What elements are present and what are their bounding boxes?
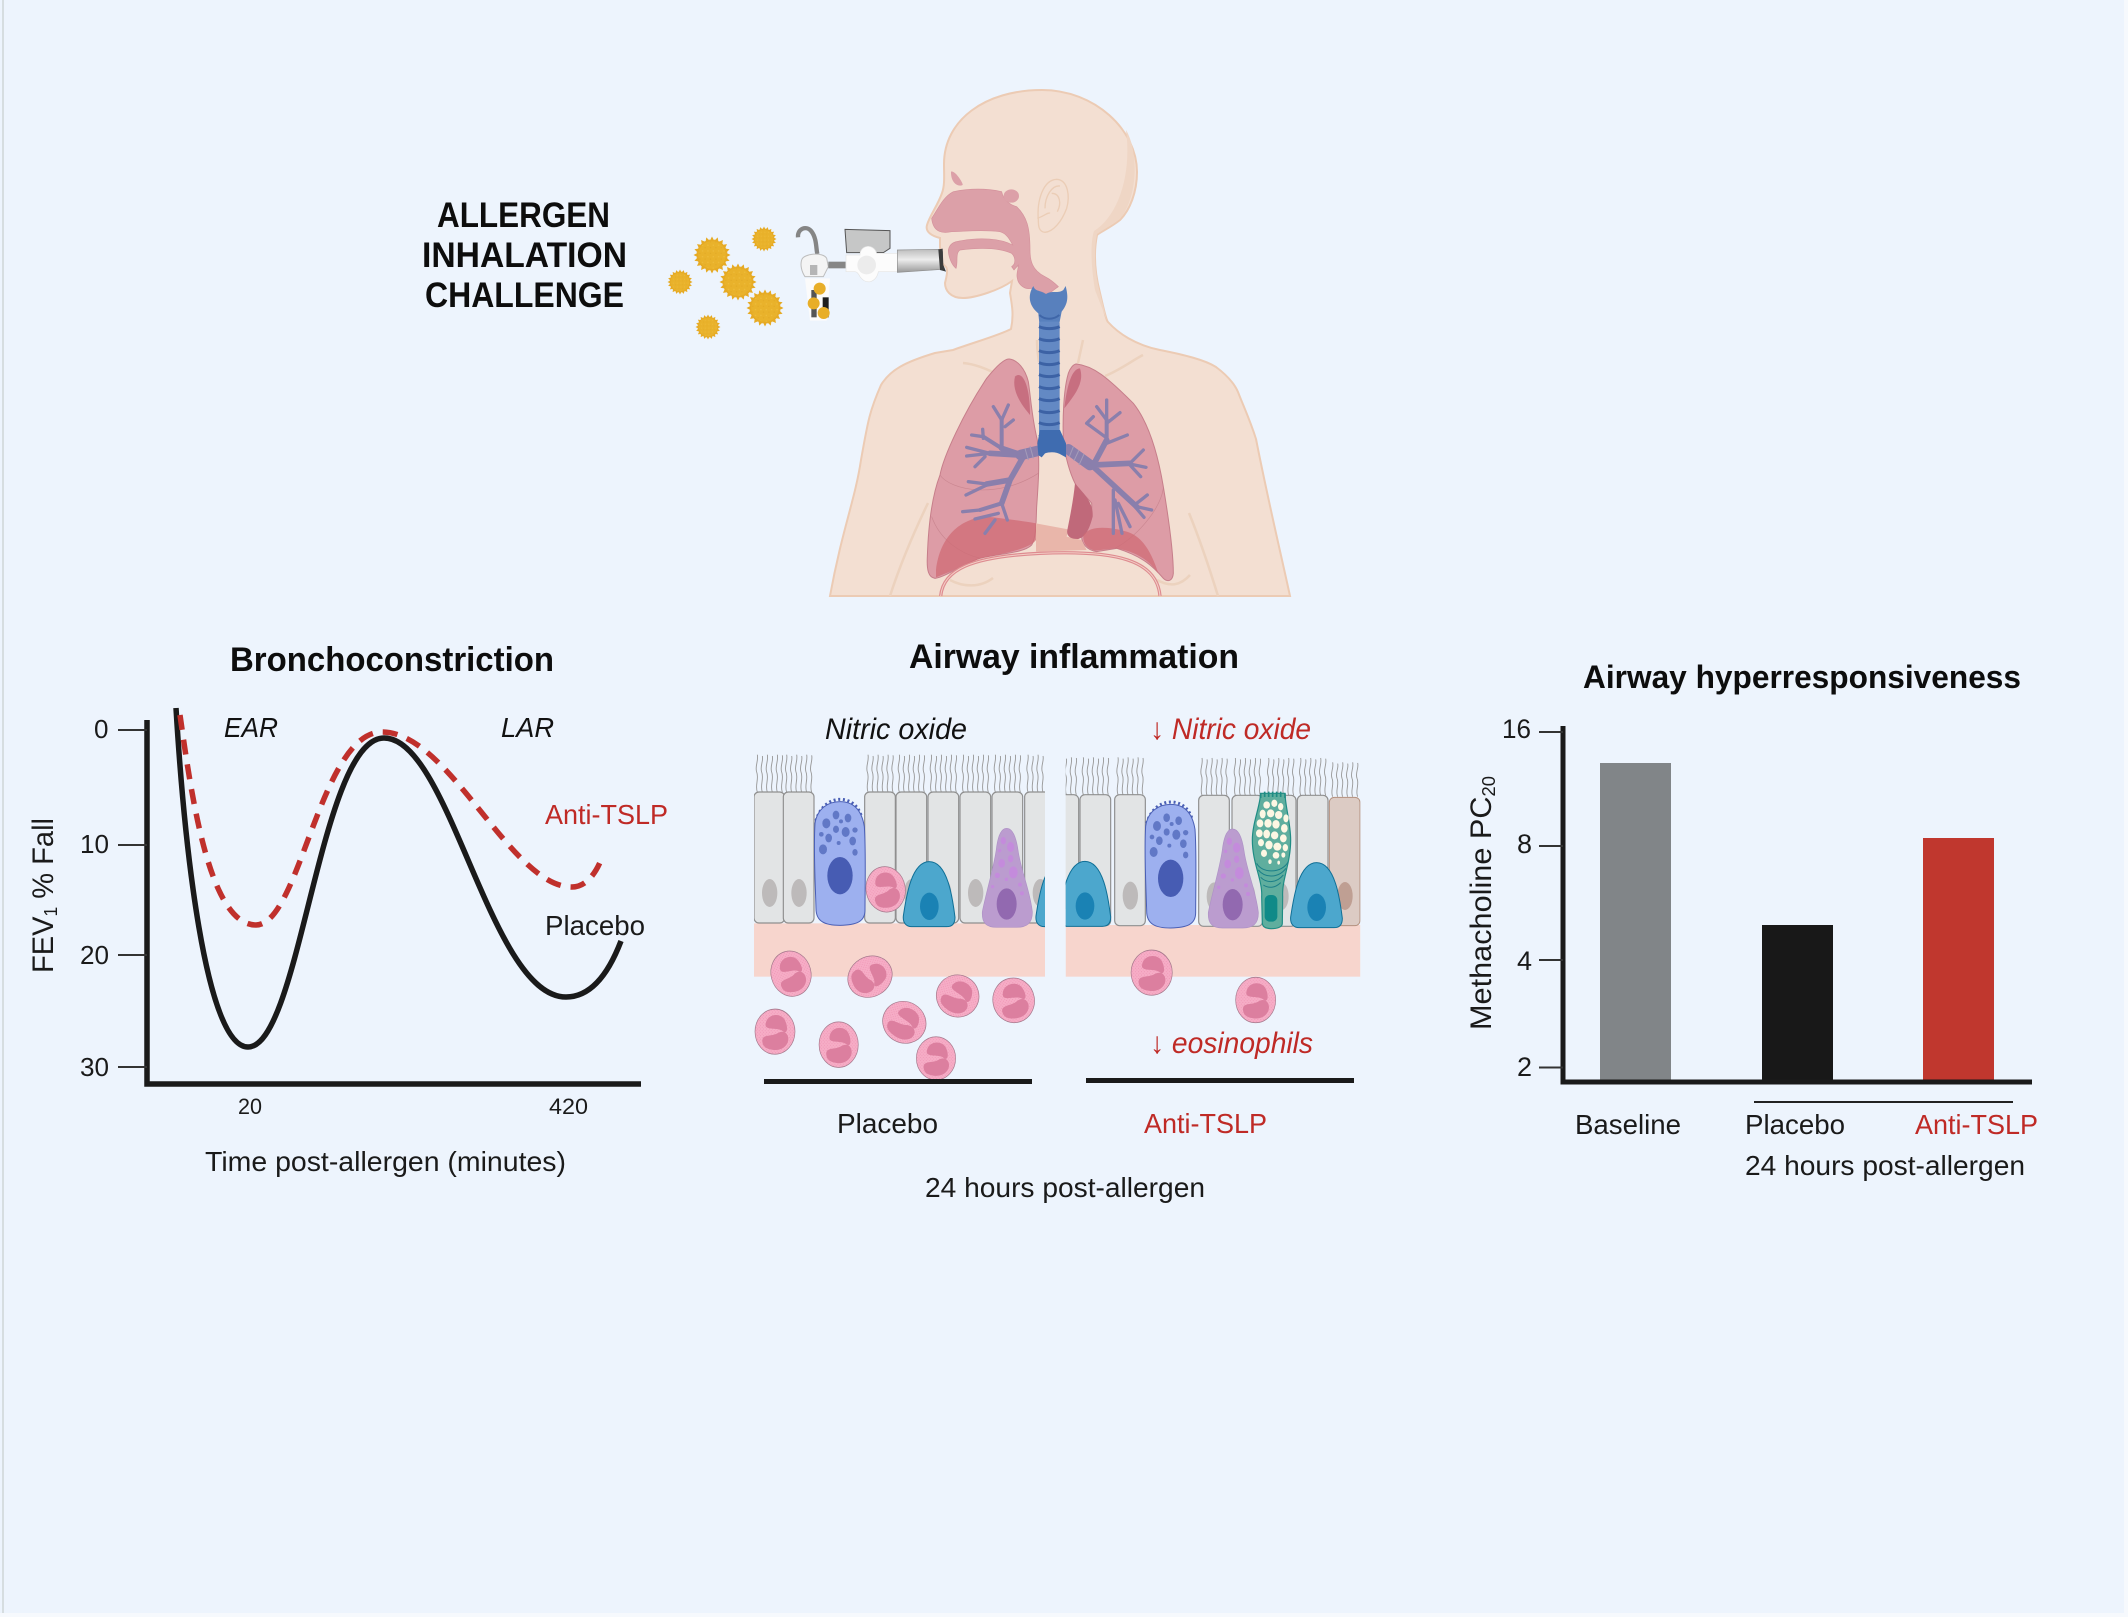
y axis ticks labels: 0 xyxy=(94,714,108,744)
anti-TSLP dashed curve xyxy=(180,715,601,925)
x axis tick labels: 20 xyxy=(238,1094,262,1119)
line chart: FEV1 fall over time: 420 xyxy=(549,1094,588,1119)
sphenoid sinus xyxy=(1004,189,1019,203)
valve box xyxy=(845,229,890,253)
line chart: FEV1 fall over time xyxy=(27,708,668,1177)
title: allergen inhalation challenge: CHALLENGE xyxy=(425,276,624,315)
anti-TSLP bar xyxy=(1923,838,1994,1081)
left lung xyxy=(927,359,1039,578)
y axis ticks labels: 30 xyxy=(80,1052,109,1082)
nasal cavity and pharynx xyxy=(932,189,1058,294)
brown ciliated cell xyxy=(1329,762,1360,926)
title: allergen inhalation challenge: ALLERGEN xyxy=(437,196,610,235)
mouthpiece cylinder xyxy=(897,249,943,272)
illustration: human torso with airways and lungs xyxy=(830,90,1290,596)
anti-TSLP baseline xyxy=(1086,1078,1354,1083)
anti-TSLP label: Anti-TSLP xyxy=(1144,1108,1267,1139)
panel: airway inflammation xyxy=(754,638,1360,1203)
icon: pollen allergen particles xyxy=(668,226,784,340)
y axis title: % Fall xyxy=(27,818,60,907)
title: allergen inhalation challenge xyxy=(422,196,627,315)
panel: bronchoconstriction xyxy=(27,641,668,1177)
y axis tick labels xyxy=(1502,714,1532,1082)
y axis ticks labels: 20 xyxy=(80,940,109,970)
right bronchial tree xyxy=(1068,400,1152,533)
axes xyxy=(1563,726,2032,1082)
left bronchial tree xyxy=(963,405,1037,533)
head and neck shading xyxy=(1092,130,1135,321)
anti-TSLP label: Anti-TSLP xyxy=(1915,1109,2038,1140)
time caption: 24 hours post-allergen xyxy=(1745,1150,2025,1181)
y axis tick labels: 2 xyxy=(1517,1052,1532,1082)
post-allergen bracket line xyxy=(1754,1101,2013,1103)
diaphragm arc xyxy=(941,553,1160,596)
y axis title: FEV xyxy=(27,915,60,973)
eosinophils label: ↓ eosinophils xyxy=(1150,1027,1313,1060)
y axis tick labels: 8 xyxy=(1517,829,1532,859)
icon: nebulizer mouthpiece xyxy=(798,228,946,321)
y axis tick labels: 16 xyxy=(1502,714,1531,744)
chest detail xyxy=(927,359,1173,596)
lung fissures xyxy=(932,473,1163,558)
anti-TSLP nitric oxide label: ↓ Nitric oxide xyxy=(1150,713,1311,746)
y axis ticks labels: 10 xyxy=(80,829,109,859)
placebo epithelium illustration xyxy=(754,754,1045,1079)
line chart: FEV1 fall over time: Placebo xyxy=(545,910,645,941)
hook tube xyxy=(798,228,817,254)
baseline label: Baseline xyxy=(1575,1109,1681,1140)
title: allergen inhalation challenge: INHALATION xyxy=(422,236,627,275)
phase labels: EAR xyxy=(224,712,278,743)
right lung xyxy=(1063,364,1173,581)
placebo label: Placebo xyxy=(1745,1109,1845,1140)
heading: Airway hyperresponsiveness xyxy=(1583,659,2021,695)
panel: airway hyperresponsiveness xyxy=(1465,659,2038,1181)
body silhouette xyxy=(830,90,1290,596)
placebo baseline xyxy=(764,1079,1032,1084)
central band xyxy=(1036,523,1087,552)
y axis ticks labels xyxy=(80,714,109,1082)
page edge line xyxy=(2,0,4,1617)
y axis tick labels: 4 xyxy=(1517,946,1532,976)
carina xyxy=(1037,430,1066,457)
teal mucus cell xyxy=(1252,792,1291,929)
baseline bar xyxy=(1600,763,1671,1081)
face and airway detail xyxy=(932,172,1068,442)
line chart: FEV1 fall over time: LAR xyxy=(501,712,554,743)
bar chart: methacholine PC20 xyxy=(1465,714,2038,1181)
heart shadow xyxy=(1067,483,1093,539)
nebulizer cup with allergen xyxy=(805,278,830,321)
heading: Airway inflammation xyxy=(909,638,1239,676)
series labels: Anti-TSLP xyxy=(545,799,668,830)
time caption: 24 hours post-allergen xyxy=(925,1172,1205,1203)
heading: Bronchoconstriction xyxy=(230,641,554,679)
x axis title: Time post-allergen (minutes) xyxy=(205,1146,566,1177)
nebulizer chamber xyxy=(801,254,828,277)
diaphragm domes xyxy=(936,517,1036,577)
ear xyxy=(1037,179,1068,232)
upper lung shading xyxy=(1014,375,1030,415)
placebo nitric oxide label: Nitric oxide xyxy=(825,713,967,746)
frontal sinus xyxy=(951,172,963,186)
valve cross xyxy=(846,246,897,282)
axes xyxy=(147,720,641,1084)
placebo curve xyxy=(176,708,621,1047)
y axis title: 1 xyxy=(41,907,61,916)
y axis title: Methacholine PC xyxy=(1465,802,1498,1030)
y axis title: 20 xyxy=(1479,776,1499,796)
placebo bar xyxy=(1762,925,1833,1081)
larynx xyxy=(1030,286,1067,323)
body creases xyxy=(890,340,1218,596)
bronchus rings xyxy=(1025,446,1084,465)
trachea rings xyxy=(1039,322,1060,442)
anti-TSLP epithelium illustration xyxy=(1048,757,1360,1023)
placebo label: Placebo xyxy=(837,1108,938,1139)
